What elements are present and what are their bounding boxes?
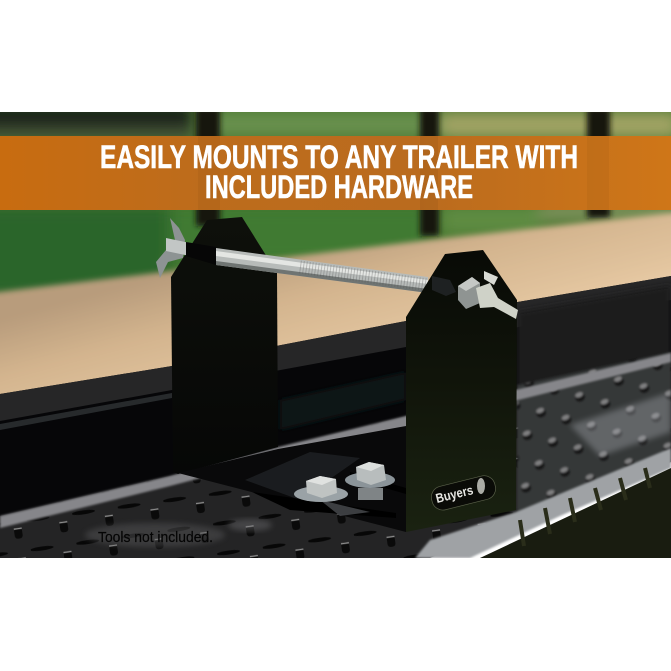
threaded rod with wing nut bbox=[156, 218, 428, 293]
nut and bolt on front plate bbox=[432, 271, 518, 319]
infographic canvas bbox=[0, 112, 671, 558]
panel: trailer photograph bbox=[0, 105, 671, 558]
blurred railing posts bbox=[196, 108, 610, 236]
footnote: tools not included: Tools not included. bbox=[98, 529, 213, 546]
diamond tread plate bbox=[0, 352, 671, 558]
front hex bolt bbox=[294, 476, 348, 502]
front upright plate bbox=[406, 250, 517, 532]
wooden deck bbox=[0, 212, 671, 402]
base plate with slots bbox=[178, 426, 406, 532]
banner bbox=[0, 136, 671, 210]
logo: Buyers: Buyers bbox=[434, 482, 475, 506]
logo: Buyers bbox=[431, 475, 496, 510]
black trailer rail bbox=[0, 276, 671, 520]
rear hex bolt bbox=[345, 462, 395, 500]
blurred green background bbox=[0, 105, 671, 302]
heading: INCLUDED HARDWARE bbox=[205, 169, 473, 205]
rear upright plate bbox=[171, 217, 278, 474]
